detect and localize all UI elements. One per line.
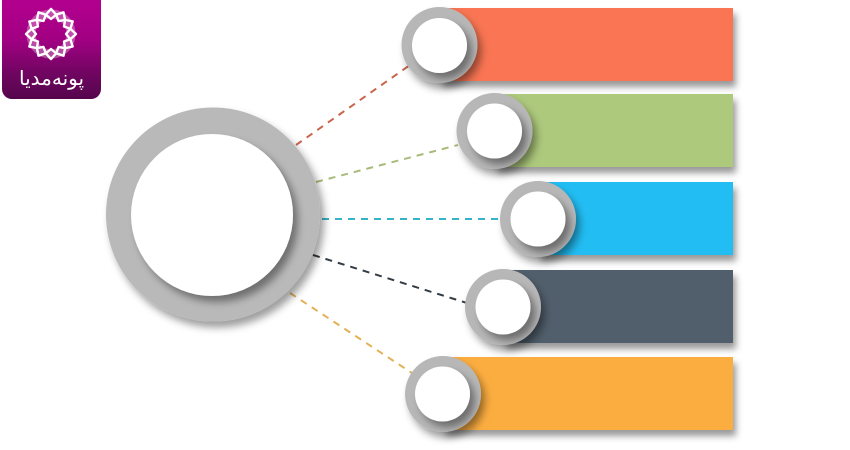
icon: twisted ribbon ring	[24, 8, 78, 60]
item 5: amber bar	[405, 356, 733, 432]
item 4: slate bar	[465, 269, 733, 345]
connector: green dashed line	[316, 145, 458, 182]
connector: orange dashed line	[290, 293, 412, 373]
item 2: green bar	[456, 93, 733, 169]
connector: dark dashed line	[313, 255, 467, 303]
connector: red dashed line	[296, 65, 410, 145]
connector: blue dashed line	[322, 218, 502, 220]
logo wordmark: پونه‌مدیا	[19, 66, 84, 90]
item 3: blue bar	[500, 181, 733, 257]
central circle	[106, 108, 320, 322]
logo badge	[2, 0, 101, 99]
item 1: orange-red bar	[402, 7, 733, 83]
